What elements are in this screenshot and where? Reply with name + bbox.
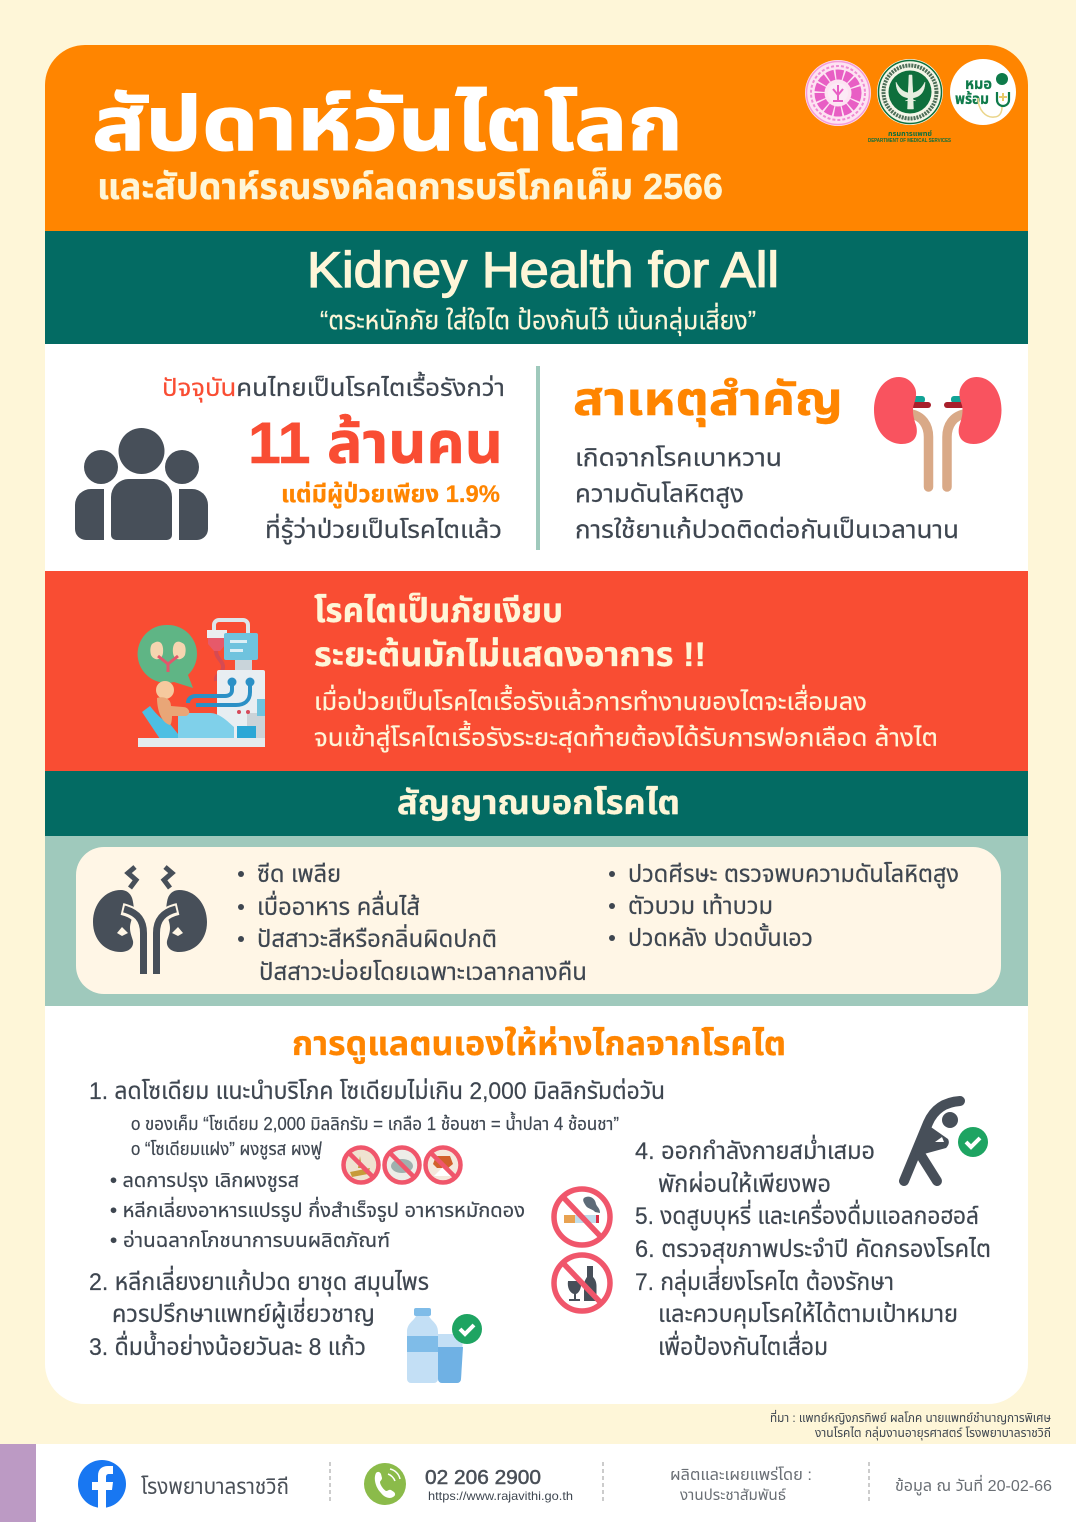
list: self care left: • อ่านฉลากโภชนาการบนผลิตภัณฑ์	[110, 1229, 390, 1252]
text: statistic: 11 ล้านคน	[248, 411, 503, 476]
text: phone and website: 02 206 2900	[425, 1467, 541, 1489]
icon: facebook	[78, 1460, 126, 1508]
text: phone and website	[425, 1467, 573, 1503]
icon: water bottle	[407, 1308, 482, 1383]
list: symptoms left: ปัสสาวะสีหรือกลิ่นผิดปกติ	[257, 923, 497, 953]
list: self care right: และควบคุมโรคให้ได้ตามเป้าหมาย	[658, 1301, 958, 1329]
text: main causes	[573, 373, 959, 544]
list: self care left: • ลดการปรุง เลิกผงชูรส	[110, 1170, 299, 1193]
logo: หมอพร้อม: พร้อม	[955, 90, 989, 108]
list: self care right	[635, 1134, 991, 1361]
text: producer: ผลิตและเผยแพร่โดย :	[670, 1466, 812, 1484]
text: statistic: แต่มีผู้ป่วยเพียง 1.9%	[281, 480, 500, 509]
heading: silent disease	[314, 592, 706, 674]
heading: self care: การดูแลตนเองให้ห่างไกลจากโรคไต	[292, 1025, 786, 1064]
icon: aching kidneys	[93, 867, 207, 974]
icon: no alcohol	[554, 1255, 610, 1311]
subtitle: และสัปดาห์รณรงค์ลดการบริโภคเค็ม 2566	[97, 166, 723, 207]
text: statistic	[162, 371, 505, 545]
list: self care left: 3. ดื่มน้ำอย่างน้อยวันละ 8 แก้ว	[89, 1330, 366, 1361]
list: self care left	[89, 1077, 665, 1361]
list: self care right: 4. ออกกำลังกายสม่ำเสมอ	[635, 1134, 875, 1165]
heading: Kidney Health for All: Kidney Health for All	[307, 242, 779, 298]
text: statistic: ปัจจุบันคนไทยเป็นโรคไตเรื้อรังกว่า	[162, 371, 505, 403]
text: main causes: การใช้ยาแก้ปวดติดต่อกันเป็นเวลานาน	[575, 516, 959, 544]
text: source: งานโรคไต กลุ่มงานอายุรศาสตร์ โรงพยาบาลราชวิถี	[815, 1426, 1051, 1440]
heading: silent disease: ระยะต้นมักไม่แสดงอาการ !!	[314, 636, 706, 674]
list: symptoms left: เบื่ออาหาร คลื่นไส้	[257, 890, 420, 921]
text: producer: งานประชาสัมพันธ์	[680, 1487, 786, 1504]
text: date: ข้อมูล ณ วันที่ 20-02-66	[895, 1474, 1052, 1495]
icon: no smoking	[554, 1189, 610, 1245]
text: phone and website: https://www.rajavithi.go.th	[428, 1489, 573, 1503]
panel: footer	[0, 1444, 1076, 1522]
text: main causes: เกิดจากโรคเบาหวาน	[575, 444, 782, 472]
logo: Rajavithi Hospital	[805, 60, 871, 126]
logo: Ministry of Public Health	[868, 59, 952, 144]
text: hospital name: โรงพยาบาลราชวิถี	[141, 1474, 289, 1499]
text: producer	[670, 1466, 812, 1504]
list: symptoms right: ปวดหลัง ปวดบั้นเอว	[628, 922, 813, 952]
tagline: “ตระหนักภัย ใส่ใจไต ป้องกันไว้ เน้นกลุ่มเสี่ยง”	[320, 302, 756, 336]
logo: Ministry of Public Health: DEPARTMENT OF MEDICAL SERVICES	[868, 138, 952, 144]
text: statistic: ที่รู้ว่าป่วยเป็นโรคไตแล้ว	[265, 513, 502, 545]
list: self care left: 1. ลดโซเดียม แนะนำบริโภค โซเดียมไม่เกิน 2,000 มิลลิกรัมต่อวัน	[89, 1077, 665, 1105]
text: main causes: ความดันโลหิตสูง	[575, 480, 744, 509]
list: self care left: 2. หลีกเลี่ยงยาแก้ปวด ยาชุด สมุนไพร	[89, 1265, 429, 1297]
text: silent disease details	[314, 684, 938, 753]
text: source	[770, 1409, 1051, 1440]
text: silent disease details: จนเข้าสู่โรคไตเรื้อรังระยะสุดท้ายต้องได้รับการฟอกเลือด ล้างไต	[314, 720, 938, 753]
panel: warning signs	[76, 847, 1001, 994]
logo: หมอพร้อม: หมอ	[965, 76, 992, 93]
list: symptoms left	[238, 861, 587, 986]
logo: Ministry of Public Health: กรมการแพทย์	[888, 130, 932, 138]
heading: warning signs: สัญญาณบอกโรคไต	[397, 784, 680, 822]
list: self care right: 5. งดสูบบุหรี่ และเครื่องดื่มแอลกอฮอล์	[635, 1199, 979, 1231]
logo: หมอพร้อม	[950, 59, 1016, 125]
title: สัปดาห์วันไตโลก	[92, 82, 683, 167]
icon: dialysis machine	[138, 620, 265, 747]
list: self care right: 6. ตรวจสุขภาพประจำปี คัดกรองโรคไต	[635, 1236, 991, 1264]
icon: phone	[364, 1463, 406, 1505]
text: source: ที่มา : แพทย์หญิงภรทิพย์ ผลโภค นายแพทย์ชำนาญการพิเศษ	[770, 1409, 1051, 1425]
list: symptoms left: ซีด เพลีย	[257, 861, 341, 888]
icon: kidneys	[874, 377, 1002, 487]
heading: silent disease: โรคไตเป็นภัยเงียบ	[314, 592, 563, 630]
list: self care left: o “โซเดียมแฝง” ผงชูรส ผงฟู	[131, 1139, 322, 1161]
list: symptoms right: ปวดศีรษะ ตรวจพบความดันโลหิตสูง	[628, 861, 959, 889]
list: self care right: 7. กลุ่มเสี่ยงโรคไต ต้องรักษา	[635, 1265, 894, 1297]
list: symptoms left: ปัสสาวะบ่อยโดยเฉพาะเวลากลางคืน	[259, 958, 587, 986]
text: main causes: สาเหตุสำคัญ	[573, 373, 843, 427]
list: self care left: ควรปรึกษาแพทย์ผู้เชี่ยวชาญ	[112, 1297, 375, 1329]
icon: no seasoning	[344, 1148, 460, 1182]
list: symptoms right: ตัวบวม เท้าบวม	[628, 893, 773, 920]
list: symptoms right	[609, 861, 959, 952]
list: self care left: o ของเค็ม “โซเดียม 2,000 มิลลิกรัม = เกลือ 1 ช้อนชา = น้ำปลา 4 ช้อนชา”	[131, 1111, 619, 1134]
list: self care left: • หลีกเลี่ยงอาหารแปรรูป กึ่งสำเร็จรูป อาหารหมักดอง	[110, 1196, 525, 1223]
text: silent disease details: เมื่อป่วยเป็นโรคไตเรื้อรังแล้วการทำงานของไตจะเสื่อมลง	[314, 684, 867, 716]
list: self care right: เพื่อป้องกันไตเสื่อม	[658, 1330, 828, 1361]
list: self care right: พักผ่อนให้เพียงพอ	[658, 1170, 831, 1198]
icon: people	[75, 428, 208, 540]
icon: exercise	[904, 1101, 988, 1181]
